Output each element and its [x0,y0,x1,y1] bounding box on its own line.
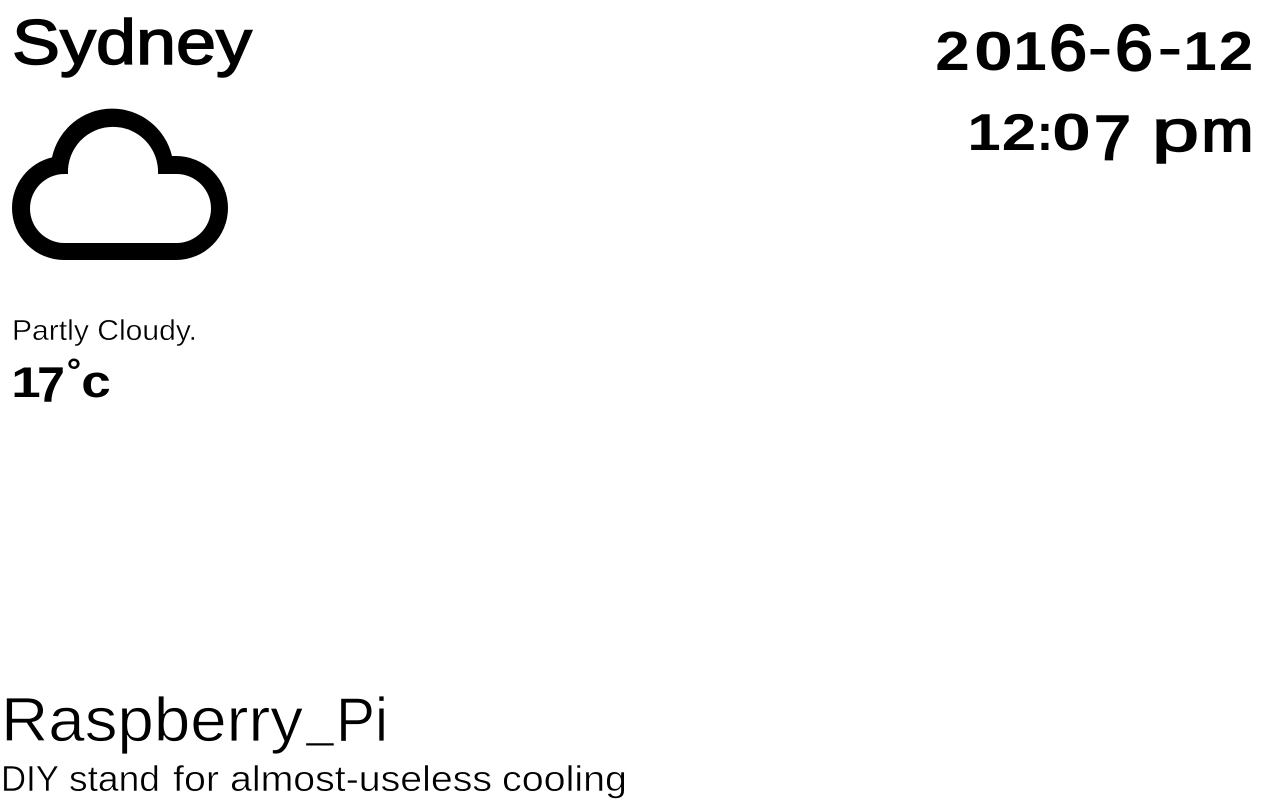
date: 6 [1049,12,1087,84]
date [935,12,1253,84]
time [967,99,1253,173]
time: m [1202,99,1253,164]
date: 1 [1013,21,1047,82]
time: 1 [967,103,1001,161]
footer subtitle: almost-useless [230,758,492,799]
footer title: Pi [336,686,388,755]
time: 7 [1094,103,1131,173]
footer subtitle: cooling [502,758,627,799]
time: 0 [1052,104,1091,162]
date: - [1158,23,1182,74]
footer title: Raspberry [1,686,303,755]
weather condition text: Partly Cloudy. [12,315,197,347]
date: 6 [1115,12,1153,84]
time: p [1152,99,1199,164]
temperature: 1 [11,359,41,407]
icon: cloud [12,109,228,260]
date: 1 [1183,21,1217,82]
date: 2 [1219,21,1253,82]
temperature: c [81,357,111,407]
temperature: ° [67,352,81,390]
footer subtitle: stand [69,758,160,799]
date: - [1088,23,1112,74]
footer title: _ [306,684,334,751]
footer subtitle: for [173,758,219,799]
temperature [11,352,111,413]
date: 2 [935,21,970,82]
footer subtitle [1,758,627,799]
temperature: 7 [37,357,65,413]
footer subtitle: DIY [1,758,59,799]
heading: city name: Sydney [12,8,253,78]
time: 2 [1002,104,1036,162]
time: : [1037,103,1053,161]
date: 0 [974,21,1013,82]
